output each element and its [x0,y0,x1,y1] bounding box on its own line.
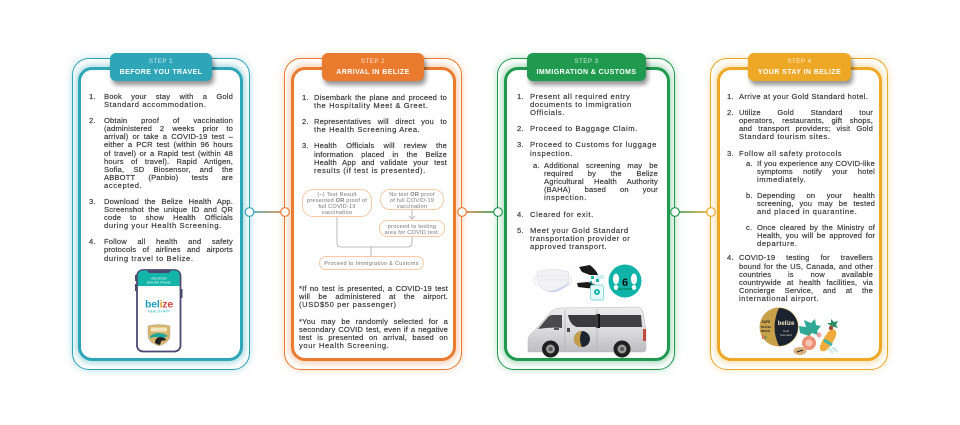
text block: step 1 instructions: 1. [89,92,96,101]
panel: step 3 immigration and customs [492,52,680,374]
heading: step 1: STEP 1 [149,58,173,65]
heading: step 2: ARRIVAL IN BELIZE [336,69,410,76]
flow box: negative test result: vaccination [322,210,352,216]
text block: step 3 instructions: 2. [517,124,524,133]
icon: gold standard badge: SAFE [762,320,770,324]
text block: step 2 instructions: 2. [302,117,309,126]
heading: step 3 [527,53,646,81]
flow box: no test: No test OR proof [389,192,435,198]
icon: face mask [534,269,572,292]
text block: step 4 instructions: b. [746,191,753,200]
flow box: negative test result: presented OR proof of [307,198,367,204]
heading: step 4: STEP 4 [787,58,812,65]
text block: step 3 instructions: 5. [517,226,524,235]
icon: gold standard badge: Gold [783,329,789,333]
text block: step 3 instructions: 4. [517,210,524,219]
flow box: no test [380,189,444,210]
flow box: negative test result: (–) Test Result [317,192,357,198]
heading: step 1: BEFORE YOU TRAVEL [120,69,202,76]
text block: step 1 instructions: 4. [89,237,96,246]
panel: step 2 arrival in Belize [280,53,466,374]
icon: phone with Belize Health App [135,269,182,352]
icon: six feet distance sign: 6 [622,277,628,289]
heading: step 4: YOUR STAY IN BELIZE [758,69,841,76]
heading: step 3: IMMIGRATION & CUSTOMS [537,69,636,76]
flow box: negative test result: full COVID-19 [318,204,356,210]
text block: step 3 instructions [517,92,658,251]
text block: step 4 instructions: 2. [727,108,734,117]
heading: step 4 [748,53,851,81]
text block: step 4 instructions: 1. [727,92,734,101]
text block: step 1 instructions: 3. [89,197,96,206]
icon: gold standard badge: TRAVEL [761,325,772,329]
text block: step 4 instructions: c. [746,223,752,232]
icon: sanitizer and hands [577,265,604,300]
text block: step 1 instructions: 2. [89,116,96,125]
text block: step 2 instructions: 1. [302,93,309,102]
icon: six feet distance sign: FEET APART [617,288,633,291]
flow box: proceed to testing: proceed to testing [388,224,436,230]
icon: phone with Belize Health App: HEALTH APP [148,310,171,314]
icon: six feet distance sign [608,264,642,298]
icon: phone with Belize Health App: BEFORE TRAVEL [147,280,172,284]
panel: step 1 before you travel [67,52,255,375]
heading: step 2 [322,53,424,81]
text block: step 2 instructions: 3. [302,141,309,150]
text block: step 2 notes [299,285,448,350]
text block: step 4 instructions: a. [746,159,753,168]
icon: gold standard badge: Standard [780,333,792,337]
heading: step 1 [110,53,212,81]
icon: phone with Belize Health App: REGISTER [151,276,167,280]
text block: step 3 instructions: 1. [517,92,524,101]
text block: step 3 instructions: a. [533,161,540,170]
icon: gold standard badge: belize [778,321,795,327]
flow box: proceed to testing [379,220,445,237]
panel: step 4 your stay in Belize [706,52,892,374]
flow box: proceed to testing: area for COVID test. [384,230,440,236]
icon: gold standard badge: btb [762,335,771,341]
text block: step 3 instructions: 3. [517,140,524,149]
text block: step 4 instructions: 3. [727,149,734,158]
text block: step 2 instructions [302,93,447,175]
text block: step 1 instructions [89,92,233,263]
flow box: proceed to immigration: Proceed to Immigration & Customs [324,260,419,266]
flow box: proceed to immigration [319,256,424,270]
flow box: no test: of full COVID-19 [390,198,434,204]
illustration: transport van [528,306,646,358]
connectors between steps [244,207,716,217]
heading: step 3: STEP 3 [574,58,599,65]
icon: gold standard badge [760,308,798,346]
flow chart: testing decision [302,189,445,270]
icon: gold standard badge: MEDAL [761,329,771,333]
text block: step 4 instructions [727,92,875,303]
illustration: beach items [794,319,838,355]
text block: step 4 instructions: 4. [727,253,734,262]
flow box: no test: vaccination [397,204,427,210]
flow box: negative test result [302,189,372,217]
icon: phone with Belize Health App: belize [145,298,173,310]
heading: step 2: STEP 2 [361,58,385,65]
